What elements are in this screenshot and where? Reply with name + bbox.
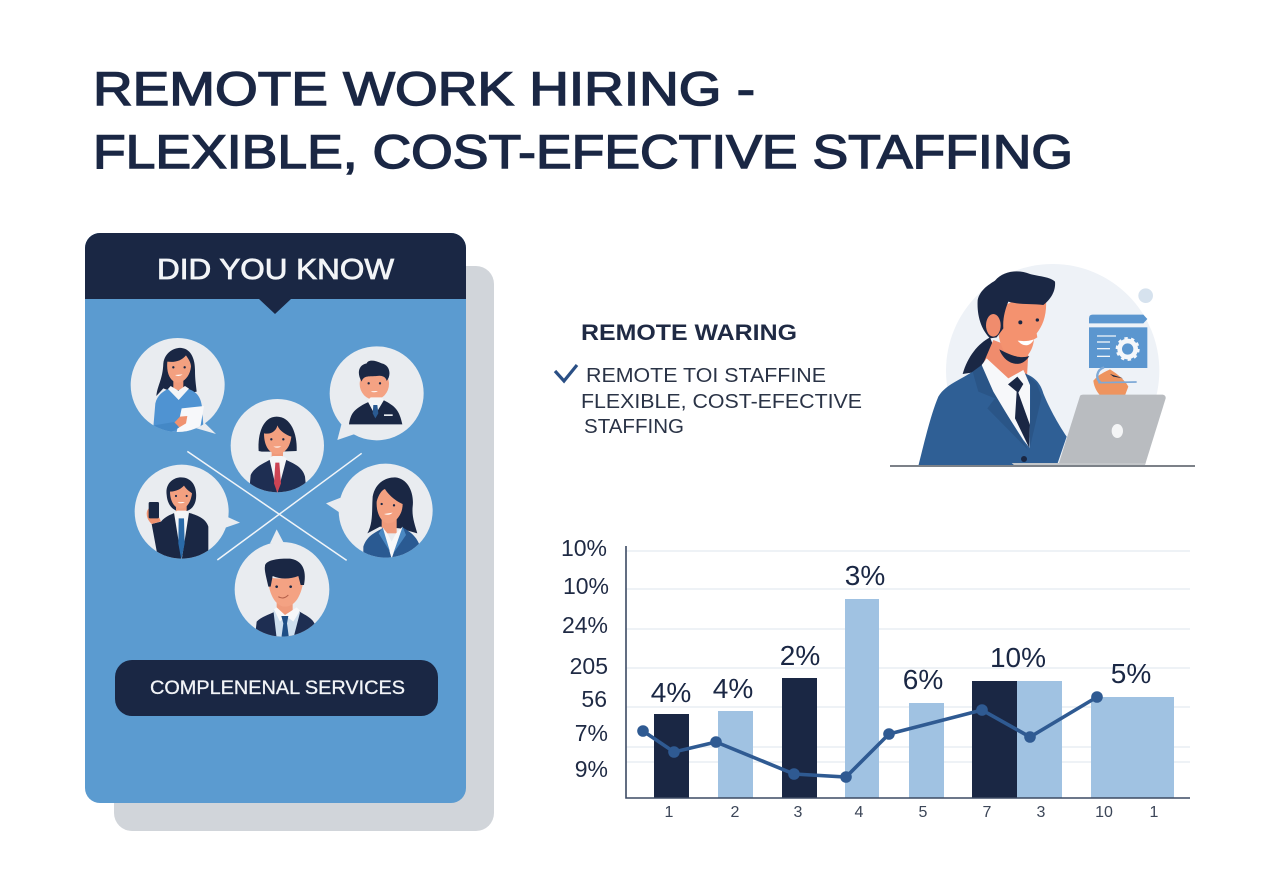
lapels bbox=[973, 365, 1042, 450]
panel heading: DID YOU KNOW bbox=[157, 254, 395, 286]
y axis labels: 7% bbox=[575, 720, 608, 746]
title: REMOTE WORK HIRING - bbox=[93, 62, 755, 115]
value labels: 3% bbox=[845, 560, 885, 591]
body text: STAFFING bbox=[584, 415, 684, 438]
hair bbox=[978, 271, 1055, 338]
avatar: woman in blue blazer bbox=[326, 464, 433, 558]
beard shadow bbox=[999, 349, 1029, 364]
x axis labels: 5 bbox=[919, 804, 928, 821]
text block: remote waring bbox=[555, 320, 862, 438]
value labels: 5% bbox=[1111, 658, 1151, 689]
icon: settings document bbox=[1089, 315, 1147, 368]
people network bbox=[131, 338, 433, 638]
crossing lines bbox=[187, 451, 362, 560]
chart: bars with line bbox=[561, 535, 1190, 821]
panel button bbox=[115, 660, 438, 716]
value labels: 10% bbox=[990, 642, 1046, 673]
illustration: person at laptop bbox=[890, 264, 1195, 477]
avatar: woman with paper bbox=[131, 338, 225, 435]
y axis labels: 24% bbox=[562, 612, 608, 638]
face bbox=[998, 295, 1046, 359]
x axis labels: 10 bbox=[1095, 804, 1113, 821]
y axis labels: 10% bbox=[563, 573, 609, 599]
body text bbox=[581, 364, 862, 438]
x axis labels: 1 bbox=[665, 804, 674, 821]
x axis labels: 2 bbox=[731, 804, 740, 821]
x axis labels bbox=[665, 804, 1159, 821]
x axis labels: 3 bbox=[794, 804, 803, 821]
avatar: man in navy tie bbox=[235, 529, 329, 638]
ponytail and hair back bbox=[963, 337, 995, 374]
trend line bbox=[637, 691, 1103, 783]
value labels: 4% bbox=[713, 673, 753, 704]
ear bbox=[986, 314, 1001, 337]
panel: did you know bbox=[85, 233, 494, 831]
y axis labels: 9% bbox=[575, 756, 608, 782]
body text: FLEXIBLE, COST-EFECTIVE bbox=[581, 390, 862, 413]
value labels: 2% bbox=[780, 640, 820, 671]
laptop bbox=[1012, 395, 1166, 466]
eyes and mouth bbox=[1018, 320, 1022, 324]
value labels: 6% bbox=[903, 664, 943, 695]
avatar: man in dark suit bbox=[330, 346, 424, 440]
icon: hand with pen bbox=[1093, 367, 1137, 395]
jacket button bbox=[1021, 456, 1027, 462]
y axis labels: 56 bbox=[581, 686, 607, 712]
grid lines bbox=[626, 551, 1190, 762]
panel shadow bbox=[114, 266, 494, 831]
avatar: woman with red tie bbox=[231, 399, 324, 493]
avatar: man with phone bbox=[135, 465, 240, 560]
title bbox=[93, 62, 1073, 178]
value labels bbox=[651, 560, 1151, 708]
title: FLEXIBLE, COST-EFECTIVE STAFFING bbox=[93, 125, 1073, 178]
x axis labels: 4 bbox=[855, 804, 864, 821]
bars bbox=[654, 599, 1174, 798]
small dot bbox=[1138, 288, 1153, 303]
desk line bbox=[890, 463, 1195, 469]
subheading: REMOTE WARING bbox=[581, 320, 797, 345]
panel body bbox=[85, 233, 466, 803]
axes bbox=[626, 546, 1190, 798]
y axis labels bbox=[561, 535, 609, 782]
y axis labels: 10% bbox=[561, 535, 607, 561]
x axis labels: 3 bbox=[1037, 804, 1046, 821]
y axis labels: 205 bbox=[570, 653, 608, 679]
icon: check mark bbox=[555, 365, 577, 381]
body text: REMOTE TOI STAFFINE bbox=[586, 364, 826, 387]
button label: COMPLENENAL SERVICES bbox=[150, 678, 405, 699]
x axis labels: 1 bbox=[1150, 804, 1159, 821]
tie bbox=[1008, 377, 1030, 447]
jacket bbox=[918, 372, 1067, 466]
x axis labels: 7 bbox=[983, 804, 992, 821]
background circle bbox=[946, 264, 1159, 477]
panel header bbox=[85, 233, 466, 314]
shirt bbox=[982, 358, 1030, 448]
neck bbox=[983, 340, 1028, 387]
value labels: 4% bbox=[651, 677, 691, 708]
